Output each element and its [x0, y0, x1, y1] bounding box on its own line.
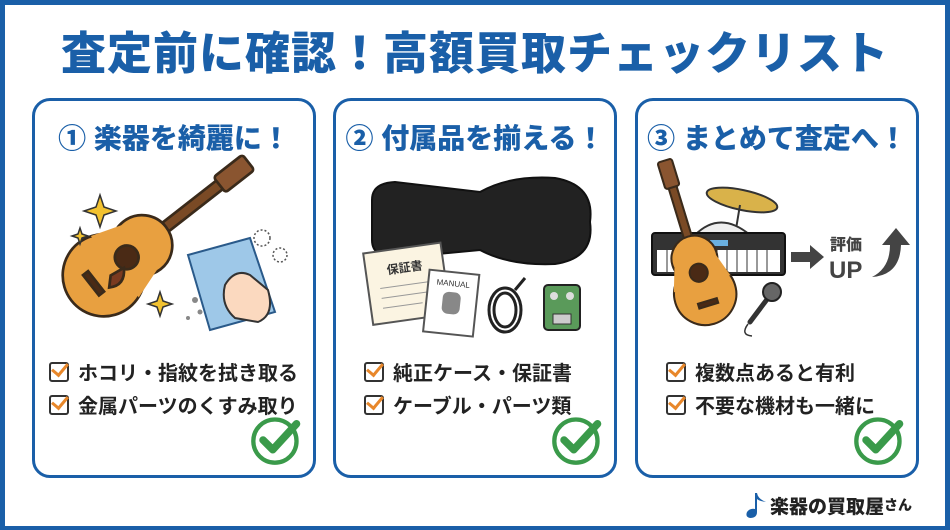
arrow: up — [872, 228, 910, 277]
illustration: warranty certificate — [363, 243, 450, 325]
checklist 1: 金属パーツのくすみ取り — [78, 396, 298, 418]
heading 1: ① 楽器を綺麗に！ — [58, 123, 290, 154]
panel: accessories — [333, 98, 617, 478]
illustration: guitar panel 3 — [635, 152, 744, 333]
checklist 2 — [364, 362, 572, 418]
text: value up: 評価 — [830, 236, 862, 254]
heading 2: ② 付属品を揃える！ — [346, 123, 604, 154]
checklist 1: ホコリ・指紋を拭き取る — [78, 363, 298, 385]
checklist 2: ケーブル・パーツ類 — [393, 396, 571, 418]
panel: bundle — [635, 98, 919, 478]
illustration: guitar case — [372, 178, 591, 264]
illustration: warranty certificate: 保証書 — [386, 257, 423, 277]
illustration: microphone — [745, 283, 781, 336]
checklist 2: 純正ケース・保証書 — [393, 363, 572, 385]
text: value up — [829, 236, 862, 284]
logo — [746, 493, 912, 518]
checklist 1 — [49, 362, 298, 418]
logo: 楽器の買取屋 — [770, 496, 884, 518]
illustration: guitar panel 1 — [46, 130, 274, 333]
icon: green check 3 — [854, 417, 904, 465]
title: 査定前に確認！高額買取チェックリスト — [61, 28, 889, 79]
illustration: manual: MANUAL — [436, 278, 471, 290]
illustration: cymbal and drum — [695, 183, 779, 235]
icon: green check 1 — [251, 417, 300, 465]
checklist 3 — [666, 362, 875, 418]
icon: green check 2 — [552, 417, 602, 465]
heading 3: ③ まとめて査定へ！ — [647, 123, 907, 154]
text: value up: UP — [829, 257, 862, 284]
illustration: cable — [489, 278, 525, 332]
panel: clean instrument — [32, 98, 316, 478]
arrow: to value up — [791, 245, 824, 269]
checklist 3: 複数点あると有利 — [695, 363, 855, 385]
illustration: manual — [423, 270, 479, 337]
logo: さん — [884, 497, 912, 513]
illustration: effects pedal — [544, 285, 580, 330]
illustration: keyboard — [652, 233, 785, 275]
icon: cloth and hand — [186, 230, 287, 330]
checklist 3: 不要な機材も一緒に — [695, 396, 875, 418]
icon: sparkles — [72, 195, 172, 316]
